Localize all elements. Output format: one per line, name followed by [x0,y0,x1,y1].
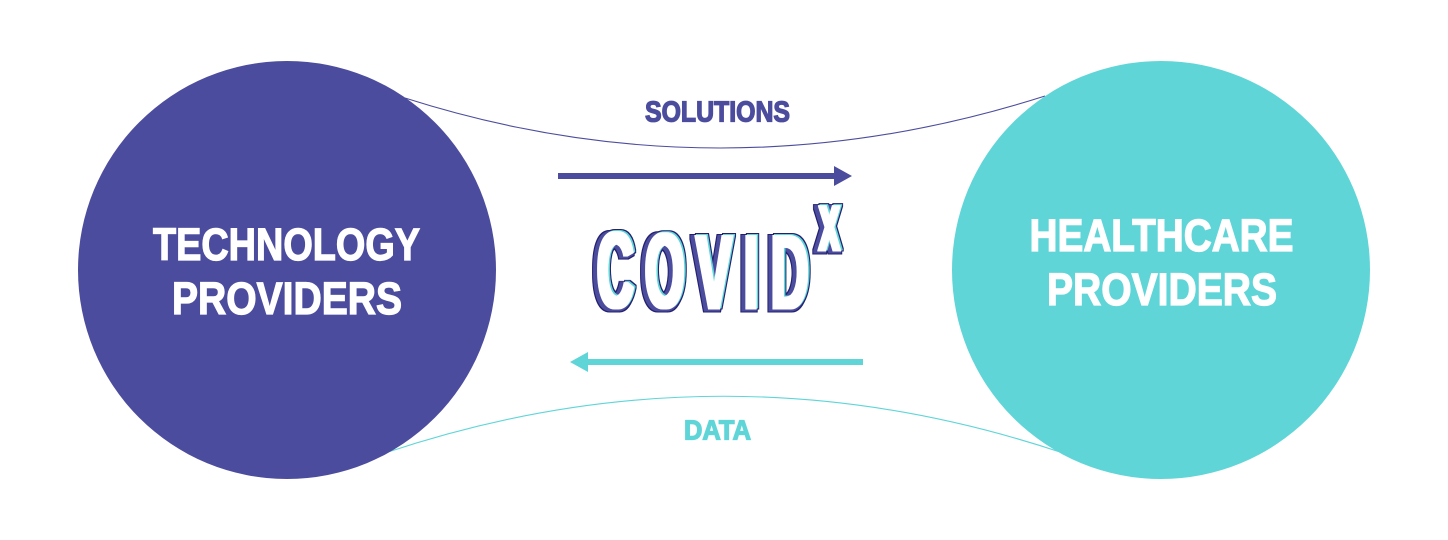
label: solutions: SOLUTIONS [645,96,790,128]
logo: COVID X: O [645,211,684,331]
heading: healthcare providers: PROVIDERS [1047,264,1277,315]
curve: data link [385,396,1060,453]
panel: technology providers circle [78,61,496,479]
logo: COVID X: V [696,212,732,332]
curve: solutions link [405,96,1045,148]
logo: COVID X: D [771,212,808,332]
heading: healthcare providers: HEALTHCARE [1030,210,1294,261]
heading: technology providers: TECHNOLOGY [153,219,420,270]
label: data: DATA [684,414,751,446]
heading: technology providers: PROVIDERS [172,273,402,324]
heading: technology providers [153,219,420,324]
logo: COVID X: C [597,209,634,332]
logo: COVID X [597,191,840,332]
arrow: solutions to the right [558,166,852,186]
logo: COVID X: X [819,191,840,265]
panel: healthcare providers circle [952,61,1370,479]
heading: healthcare providers [1030,210,1294,315]
logo: COVID X: I [744,212,758,332]
arrow: data to the left [570,352,863,372]
